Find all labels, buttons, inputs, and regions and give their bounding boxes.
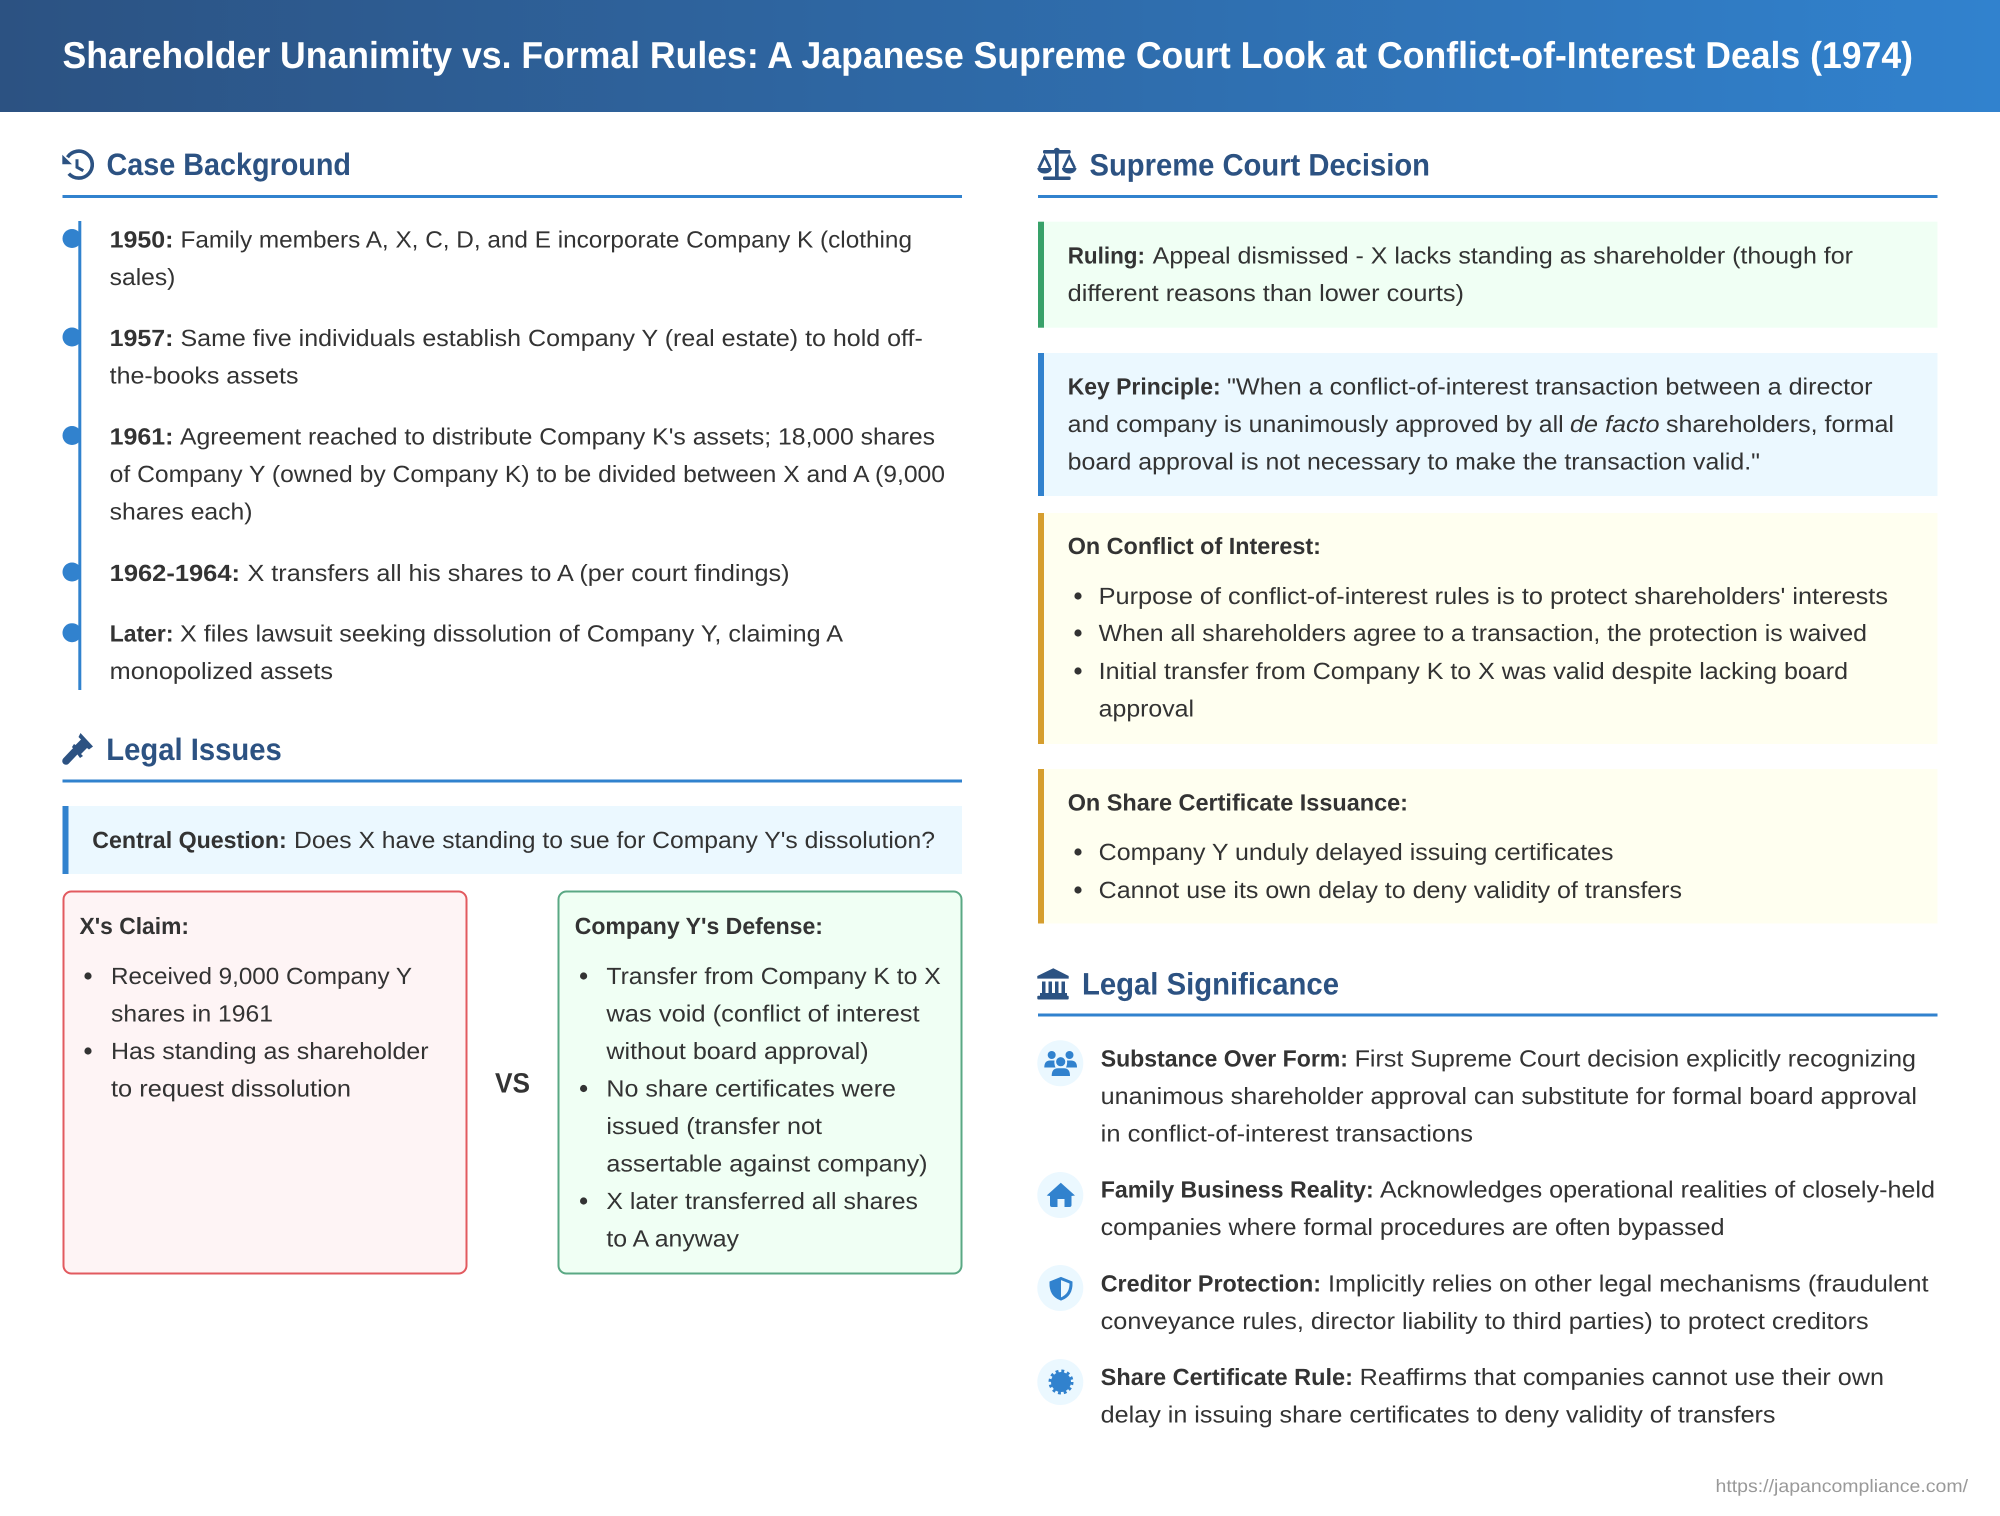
callout: ruling: Ruling: xyxy=(1068,243,1145,269)
panel: legal significance xyxy=(1037,967,1938,1428)
timeline item: 1962-1964: X transfers all his shares to A (per court findings) xyxy=(248,560,790,586)
timeline item: 1961 xyxy=(110,423,945,524)
item: family business reality: Acknowledges operational realities of closely-held xyxy=(1380,1176,1935,1202)
callout: ruling: different reasons than lower courts) xyxy=(1068,280,1464,306)
item: substance over form xyxy=(1037,1040,1917,1147)
heading: case background: Case Background xyxy=(106,147,351,182)
callout: central question: Does X have standing to sue for Company Y's dissolution? xyxy=(294,827,935,853)
card: X's claim: shares in 1961 xyxy=(111,1000,273,1026)
callout: key principle: "When a conflict-of-interest transaction between a director xyxy=(1227,374,1873,400)
title banner xyxy=(0,0,2000,112)
item: share certificate rule xyxy=(1037,1359,1884,1428)
heading: legal issues: Legal Issues xyxy=(106,732,282,767)
card: company Y's defense: assertable against company) xyxy=(606,1150,928,1176)
card: company Y's defense: Transfer from Company K to X xyxy=(606,963,941,989)
callout: key principle xyxy=(1038,353,1938,496)
item: family business reality: companies where formal procedures are often bypassed xyxy=(1101,1214,1724,1240)
card: company Y's defense: Company Y's Defense: xyxy=(575,913,823,939)
item: creditor protection xyxy=(1037,1265,1929,1334)
card: company Y's defense: No share certificates were xyxy=(606,1076,896,1102)
callout: on share certificate issuance: Cannot use its own delay to deny validity of transfers xyxy=(1099,877,1682,903)
card: company Y's defense: X later transferred all shares xyxy=(606,1188,918,1214)
timeline item: 1957: the-books assets xyxy=(110,363,298,389)
icon: history clock xyxy=(62,151,92,178)
timeline item: 1950 xyxy=(110,227,912,290)
callout: on conflict of interest: Purpose of conflict-of-interest rules is to protect shareholders' interests xyxy=(1099,583,1888,609)
item: creditor protection: Creditor Protection: xyxy=(1101,1270,1321,1296)
icon: people xyxy=(1037,1040,1083,1086)
callout: ruling xyxy=(1038,222,1938,328)
timeline item: later: X files lawsuit seeking dissolution of Company Y, claiming A xyxy=(180,621,843,647)
card: company Y's defense: issued (transfer not xyxy=(606,1113,823,1139)
callout: on conflict of interest: When all shareholders agree to a transaction, the protection is waived xyxy=(1099,620,1867,646)
icon: scales xyxy=(1037,148,1076,180)
callout: on conflict of interest: On Conflict of Interest: xyxy=(1068,533,1321,559)
timeline item: later: monopolized assets xyxy=(110,658,333,684)
timeline item: 1961: shares each) xyxy=(110,498,252,524)
timeline item: 1961: of Company Y (owned by Company K) to be divided between X and A (9,000 xyxy=(110,461,945,487)
card: X's claim: Has standing as shareholder xyxy=(111,1038,429,1064)
icon: certificate badge xyxy=(1037,1359,1083,1405)
callout: on conflict of interest xyxy=(1038,513,1938,744)
card: X's claim xyxy=(64,892,466,1274)
item: share certificate rule: Share Certificate Rule: xyxy=(1101,1364,1353,1390)
callout: key principle: shareholders, formal xyxy=(1666,411,1894,437)
callout: central question: Central Question: xyxy=(92,827,287,853)
item: family business reality: Family Business Reality: xyxy=(1101,1176,1374,1202)
callout: on conflict of interest: Initial transfer from Company K to X was valid despite lacking board xyxy=(1099,658,1848,684)
title: Shareholder Unanimity vs. Formal Rules: A Japanese Supreme Court Look at Conflict-of-Interest Deals (1974) xyxy=(62,34,1913,76)
icon: gavel xyxy=(66,733,93,761)
heading: supreme court decision: Supreme Court Decision xyxy=(1090,148,1430,182)
card: company Y's defense: to A anyway xyxy=(606,1226,739,1252)
card: company Y's defense xyxy=(558,892,962,1274)
timeline item: 1957 xyxy=(110,325,923,389)
card: X's claim: to request dissolution xyxy=(111,1076,351,1102)
timeline item: 1950: Family members A, X, C, D, and E incorporate Company K (clothing xyxy=(180,227,912,253)
panel: legal issues xyxy=(62,732,962,1274)
icon: house xyxy=(1037,1172,1083,1218)
item: creditor protection: Implicitly relies on other legal mechanisms (fraudulent xyxy=(1328,1270,1929,1296)
panel: supreme court decision xyxy=(1037,148,1938,924)
callout: on share certificate issuance: Company Y unduly delayed issuing certificates xyxy=(1099,839,1614,865)
heading: legal significance: Legal Significance xyxy=(1082,967,1339,1002)
timeline item: 1957: 1957: xyxy=(110,325,174,351)
callout: key principle: and company is unanimously approved by all xyxy=(1068,411,1564,437)
footer url: https://japancompliance.com/ xyxy=(1716,1476,1968,1496)
callout: key principle: board approval is not necessary to make the transaction valid." xyxy=(1068,448,1760,474)
timeline item: 1957: Same five individuals establish Company Y (real estate) to hold off- xyxy=(180,325,923,351)
timeline item: later xyxy=(110,621,843,684)
card: X's claim: Received 9,000 Company Y xyxy=(111,963,412,989)
item: share certificate rule: delay in issuing share certificates to deny validity of transfers xyxy=(1101,1402,1776,1428)
item: share certificate rule: Reaffirms that companies cannot use their own xyxy=(1360,1364,1884,1390)
timeline xyxy=(62,221,945,690)
timeline item: 1961: Agreement reached to distribute Company K's assets; 18,000 shares xyxy=(180,423,935,449)
card: company Y's defense: was void (conflict of interest xyxy=(605,1000,920,1026)
timeline item: 1962-1964: 1962-1964: xyxy=(110,560,240,586)
VS label: VS xyxy=(495,1068,530,1099)
item: substance over form: First Supreme Court decision explicitly recognizing xyxy=(1355,1046,1916,1072)
timeline item: 1950: 1950: xyxy=(110,227,174,253)
item: substance over form: Substance Over Form: xyxy=(1101,1046,1348,1072)
item: substance over form: in conflict-of-interest transactions xyxy=(1101,1121,1473,1147)
timeline item: 1950: sales) xyxy=(110,264,175,290)
callout: on share certificate issuance xyxy=(1038,769,1938,924)
callout: central question xyxy=(62,806,962,874)
callout: ruling: Appeal dismissed - X lacks standing as shareholder (though for xyxy=(1153,243,1853,269)
item: creditor protection: conveyance rules, director liability to third parties) to protect creditors xyxy=(1101,1308,1869,1334)
item: substance over form: unanimous shareholder approval can substitute for formal board approval xyxy=(1101,1083,1917,1109)
callout: on share certificate issuance: On Share Certificate Issuance: xyxy=(1068,790,1408,816)
card: company Y's defense: without board approval) xyxy=(605,1038,869,1064)
callout: on conflict of interest: approval xyxy=(1099,695,1194,721)
panel: case background xyxy=(62,147,962,690)
icon: shield xyxy=(1037,1265,1083,1311)
card: X's claim: X's Claim: xyxy=(80,913,189,939)
icon: bank xyxy=(1037,968,1069,1000)
item: family business reality xyxy=(1037,1172,1935,1240)
timeline item: later: Later: xyxy=(110,621,174,647)
callout: key principle: Key Principle: xyxy=(1068,374,1221,400)
callout: key principle: de facto xyxy=(1570,411,1660,437)
timeline item: 1961: 1961: xyxy=(110,423,174,449)
